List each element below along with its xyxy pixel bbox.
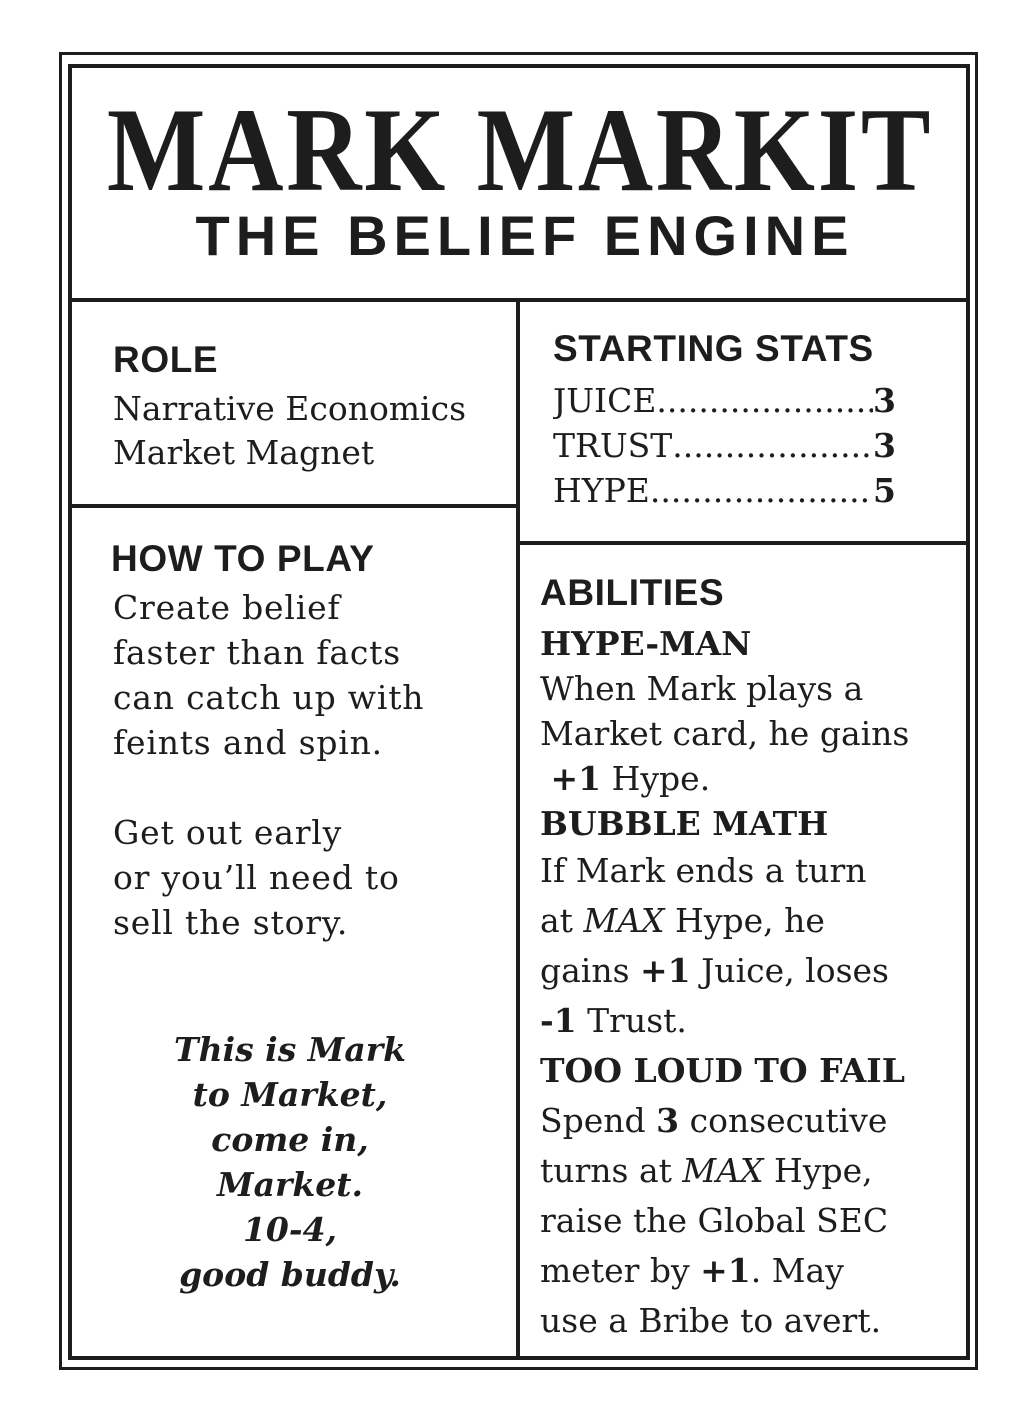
heading: stats: STARTING STATS [553,328,874,369]
stats list [553,381,896,510]
subtitle: THE BELIEF ENGINE [196,204,854,267]
text: role: Market Magnet [113,433,374,472]
panel: abilities: -1 Trust. [540,1001,687,1040]
quote [174,1030,406,1294]
quote: Market. [217,1165,363,1204]
quote: This is Mark [174,1030,406,1069]
ability text: BUBBLE MATH [540,804,828,843]
panel: how to play [111,538,424,942]
panel: abilities: meter by +1. May [540,1251,844,1290]
ability text: +1 Hype. [550,759,710,798]
heading: how to play: HOW TO PLAY [111,538,375,579]
text: how to play: Get out early [113,813,342,852]
panel: role [113,339,466,472]
stats list: 3 [873,381,896,420]
quote: to Market, [193,1075,387,1114]
panel: abilities: gains +1 Juice, loses [540,951,889,990]
text: how to play [113,588,424,942]
text: how to play: or you’ll need to [113,858,400,897]
stats list: 3 [873,426,896,465]
quote: 10-4, [243,1210,337,1249]
heading: abilities: ABILITIES [540,572,724,613]
ability text: HYPE-MAN [540,624,751,663]
stats list: 5 [873,471,896,510]
panel: abilities: Spend 3 consecutive [540,1101,887,1140]
ability text: Market card, he gains [540,714,909,753]
stats list: TRUST [553,426,672,465]
text: role: Narrative Economics [113,389,466,428]
panel: abilities: If Mark ends a turn [540,851,867,890]
panel: abilities: TOO LOUD TO FAIL [540,1051,905,1090]
text: how to play: Create belief [113,588,340,627]
ability text [540,624,909,843]
stats list: HYPE [553,471,650,510]
text: how to play: can catch up with [113,678,424,717]
ability text: When Mark plays a [540,669,863,708]
panel: abilities: turns at MAX Hype, [540,1151,873,1190]
panel: abilities: use a Bribe to avert. [540,1301,881,1340]
quote: come in, [211,1120,369,1159]
text: role [113,389,466,472]
quote: good buddy. [179,1255,401,1294]
text: how to play: faster than facts [113,633,401,672]
heading: role: ROLE [113,339,218,380]
panel: starting stats [553,328,896,510]
text: how to play: sell the story. [113,903,348,942]
text: how to play: feints and spin. [113,723,383,762]
panel: abilities: raise the Global SEC [540,1201,888,1240]
panel: abilities [540,572,909,1340]
panel: abilities: at MAX Hype, he [540,901,825,940]
title: MARK MARKIT [107,83,933,216]
stats list: JUICE [553,381,656,420]
